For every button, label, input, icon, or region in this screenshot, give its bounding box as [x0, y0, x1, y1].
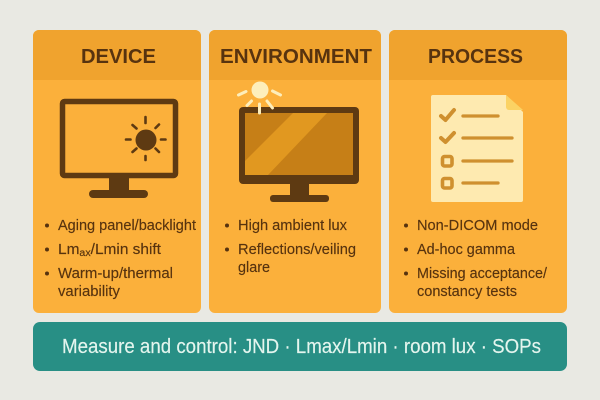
icon: monitor with glare — [238, 82, 359, 202]
list: device issues: /Lmin shift — [91, 242, 161, 258]
icon: checklist document — [431, 95, 523, 202]
list: environment issues — [225, 218, 356, 276]
heading: process: PROCESS — [428, 46, 523, 68]
icon: monitor with sun — [62, 102, 176, 198]
panel: process — [389, 30, 567, 313]
list: environment issues: glare — [238, 260, 270, 276]
list: process issues — [404, 218, 548, 300]
list: process issues: constancy tests — [417, 284, 517, 300]
heading: device: DEVICE — [81, 46, 156, 68]
banner: measure and control — [33, 322, 567, 371]
list: device issues: variability — [58, 284, 121, 300]
list: process issues: Missing acceptance/ — [417, 266, 548, 282]
list: device issues: Aging panel/backlight — [58, 218, 196, 234]
panel: device — [33, 30, 201, 313]
list: device issues — [45, 218, 196, 300]
banner text: Measure and control: JND · Lmax/Lmin · room lux · SOPs — [62, 336, 541, 358]
environment header band — [209, 30, 381, 80]
list: process issues: Ad-hoc gamma — [417, 242, 516, 258]
list: device issues: Lm — [58, 242, 78, 258]
panel: environment — [209, 30, 381, 313]
device header band — [33, 30, 201, 80]
list: environment issues: High ambient lux — [238, 218, 348, 234]
list: device issues: Warm-up/thermal — [58, 266, 173, 282]
list: environment issues: Reflections/veiling — [238, 242, 356, 258]
process header band — [389, 30, 567, 80]
list: process issues: Non-DICOM mode — [417, 218, 538, 234]
heading: environment: ENVIRONMENT — [220, 46, 372, 68]
list: device issues: ax — [79, 248, 91, 259]
